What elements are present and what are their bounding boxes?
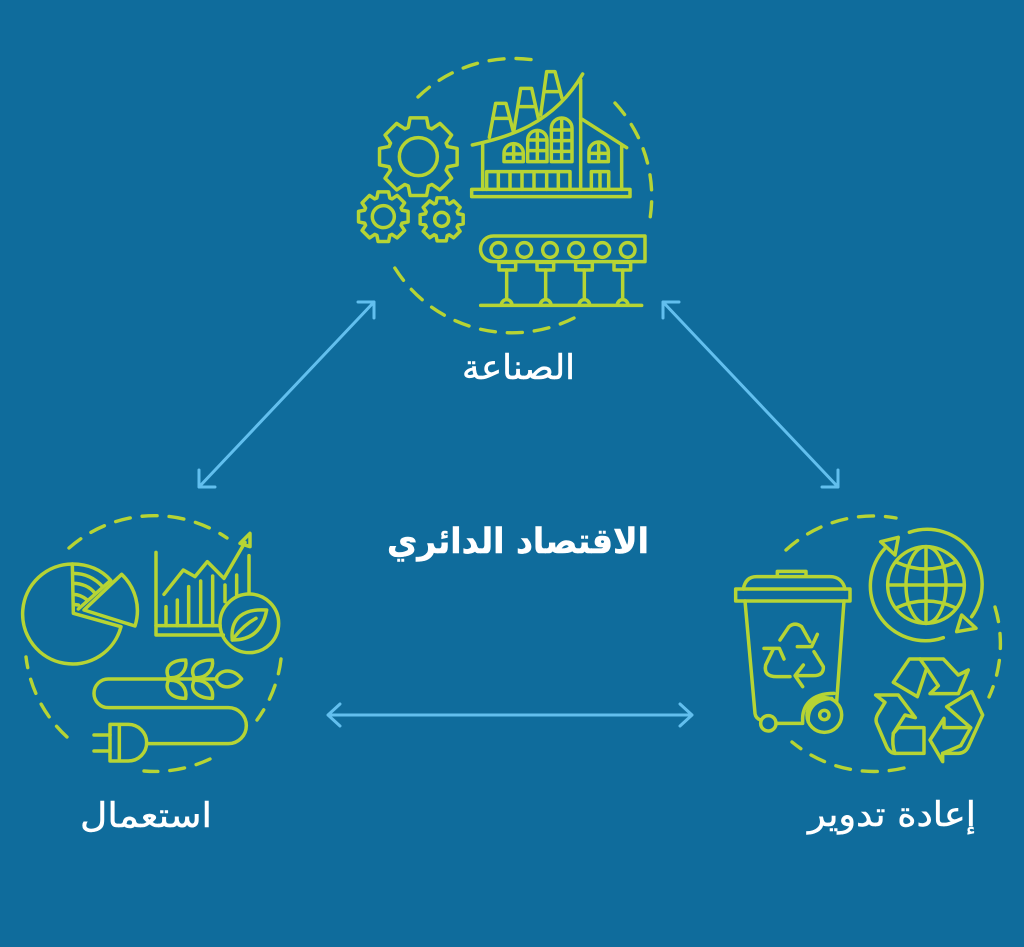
- dashed ring: industry: [393, 58, 652, 333]
- arrow: use to recycling: [328, 704, 692, 726]
- title: الاقتصاد الدائري: [387, 522, 649, 562]
- dashed ring: recycling: [786, 516, 1000, 772]
- icon: large gear: [380, 118, 457, 195]
- dashed ring: use: [26, 516, 281, 771]
- icon: large recycling symbol: [876, 659, 983, 762]
- arrow: industry to use: [199, 302, 374, 487]
- label: use: استعمال: [80, 796, 212, 836]
- icon: wheat: [167, 660, 242, 698]
- icon: factory: [472, 72, 630, 197]
- icon: pie chart: [23, 564, 137, 664]
- arrow: industry to recycling: [663, 302, 838, 487]
- icon: globe with cycle arrows: [870, 529, 982, 641]
- icon: small left gear: [359, 192, 408, 241]
- panel: recycling: [736, 516, 1000, 835]
- icon: factory and gears: [359, 72, 645, 305]
- icon: leaf badge: [220, 594, 279, 653]
- icon: charts, wheat and plug: [23, 533, 279, 761]
- icon: bin, globe and recycling: [736, 529, 983, 762]
- label: industry: الصناعة: [462, 348, 575, 388]
- icon: small right gear: [420, 198, 463, 241]
- label: recycling: إعادة تدوير: [806, 795, 976, 835]
- icon: power cable and plug: [94, 679, 246, 761]
- panel: use: [23, 516, 281, 836]
- icon: growth chart: [156, 533, 250, 635]
- icon: conveyor belt: [480, 236, 645, 305]
- panel: industry: [359, 58, 652, 388]
- icon: recycling bin: [736, 571, 850, 732]
